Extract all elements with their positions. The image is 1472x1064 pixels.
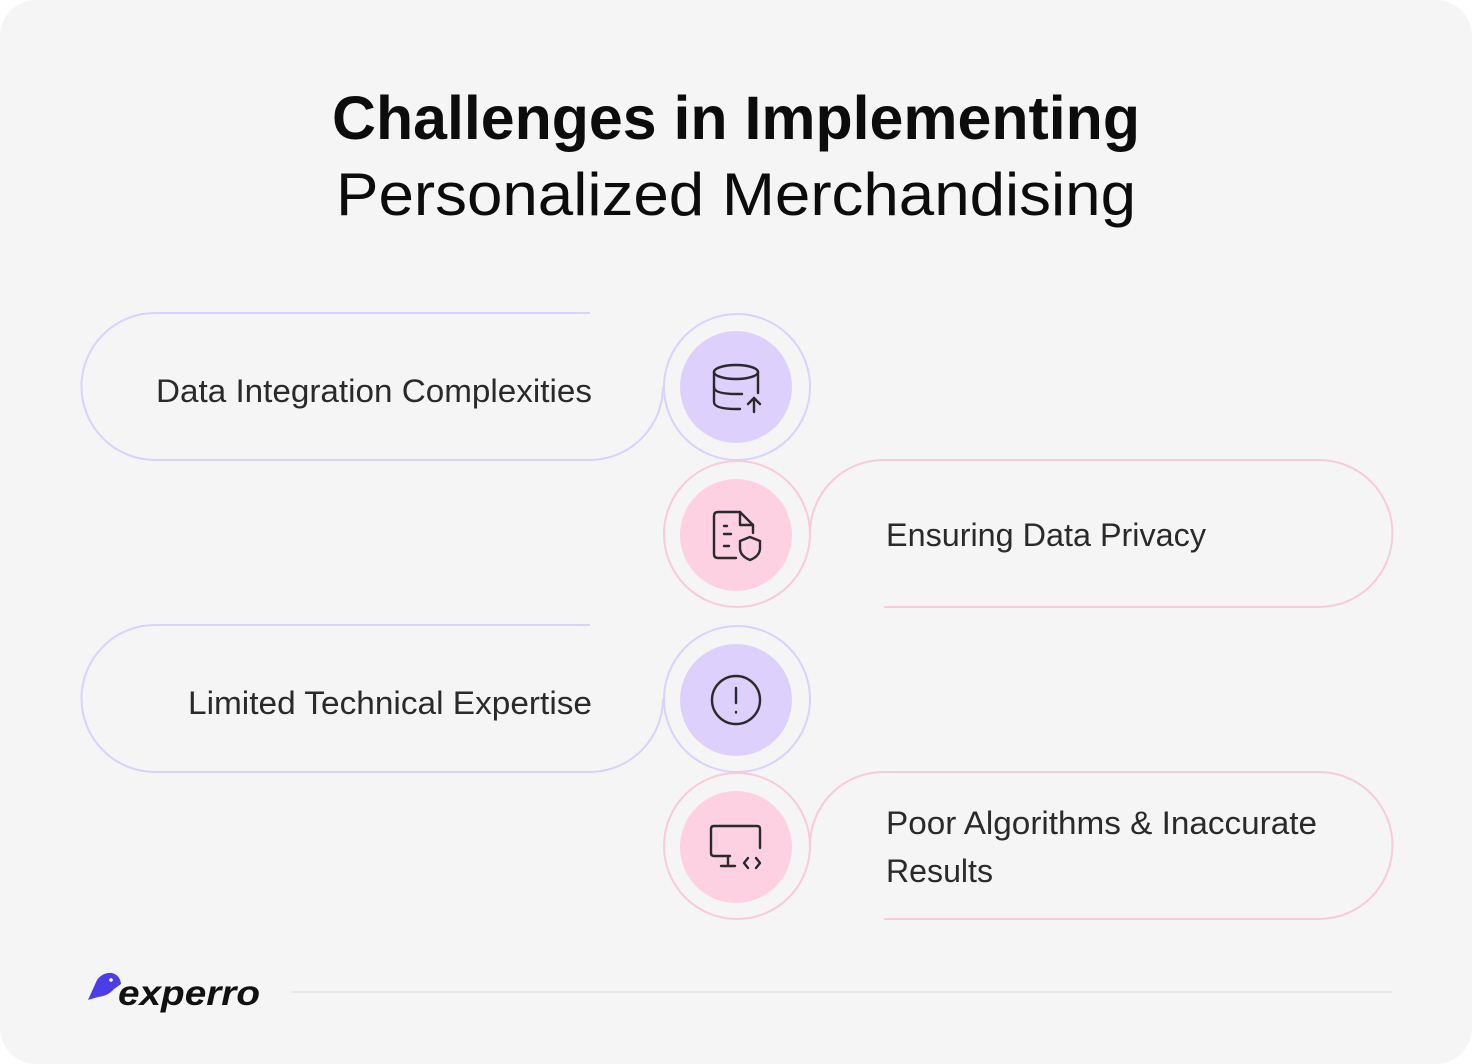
panel: Poor Algorithms & Inaccurate Results: Results: [886, 853, 993, 889]
icon: monitor code: [711, 826, 760, 868]
panel: Ensuring Data Privacy: [664, 460, 1392, 607]
panel: Poor Algorithms & Inaccurate Results: Poor Algorithms & Inaccurate: [886, 805, 1317, 841]
icon: alert: [712, 676, 760, 724]
title: Challenges in Implementing: [332, 84, 1140, 152]
panel: Data Integration Complexities: Data Integration Complexities: [156, 373, 592, 409]
icon: database upload: [714, 365, 760, 412]
icon: document shield: [714, 512, 760, 560]
panel: Ensuring Data Privacy: Ensuring Data Privacy: [886, 517, 1206, 553]
title: [332, 84, 1140, 228]
title: Personalized Merchandising: [336, 161, 1136, 228]
logo: experro: experro: [118, 974, 260, 1013]
panel: Limited Technical Expertise: [82, 625, 810, 772]
panel: Limited Technical Expertise: Limited Technical Expertise: [188, 685, 592, 721]
panel: Poor Algorithms & Inaccurate Results: [664, 772, 1392, 919]
panel: Data Integration Complexities: [82, 313, 810, 460]
